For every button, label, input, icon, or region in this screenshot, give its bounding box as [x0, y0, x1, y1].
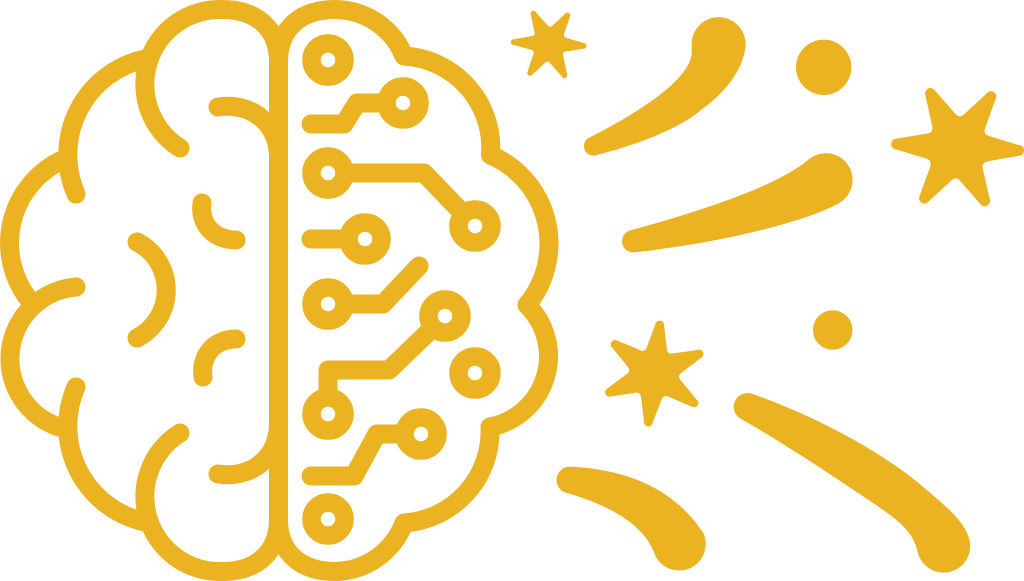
central divider	[269, 60, 288, 520]
streak: lower left	[557, 467, 706, 571]
left hemisphere outline	[10, 9, 279, 572]
star: large right	[891, 88, 1024, 206]
streak: second	[622, 153, 853, 252]
streak: large lower right	[734, 393, 970, 573]
burst decorations	[511, 11, 1024, 573]
brain icon	[10, 9, 549, 572]
star: middle	[605, 321, 703, 427]
dot: upper	[796, 40, 851, 95]
streak: top	[584, 17, 746, 156]
circuit nodes	[312, 44, 492, 536]
left hemisphere folds	[137, 106, 278, 475]
star: small top	[511, 11, 587, 78]
circuit traces	[311, 103, 475, 476]
dot: lower	[813, 310, 852, 350]
right hemisphere outline	[278, 10, 549, 572]
